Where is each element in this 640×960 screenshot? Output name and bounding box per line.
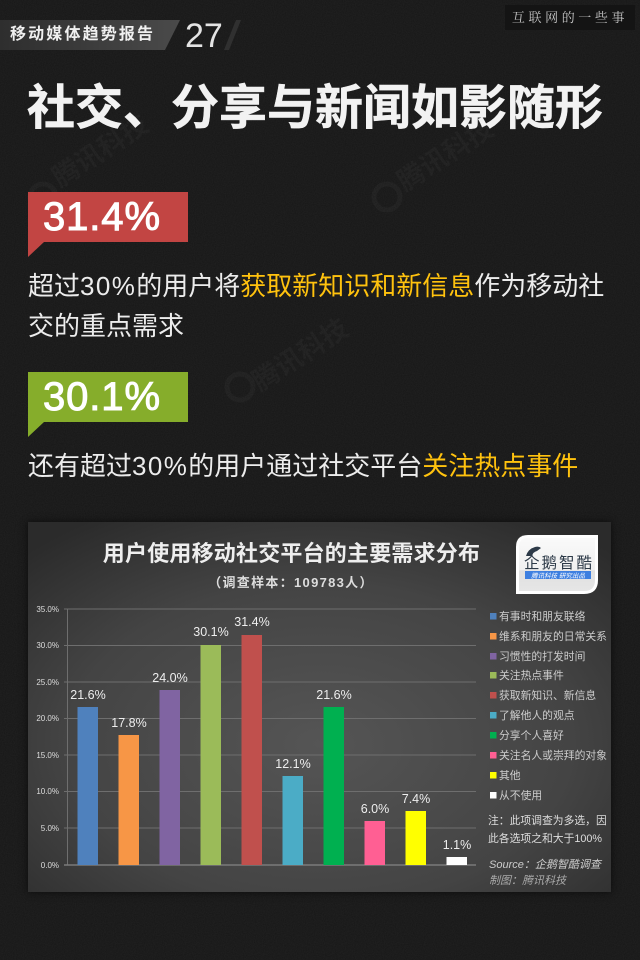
text block: finding one: 超过30%的用户将获取新知识和新信息作为移动社 (28, 271, 604, 301)
callout: 31.4%: 31.4% (43, 195, 161, 239)
legend: 习惯性的打发时间 (499, 649, 585, 663)
callout: 30.1%: 30.1% (43, 375, 161, 419)
bar value labels: 7.4% (402, 792, 430, 806)
bar value labels: 1.1% (443, 838, 471, 852)
panel: chart (28, 522, 611, 892)
bar value labels (70, 615, 471, 852)
y axis labels: 30.0% (36, 641, 59, 650)
legend: 了解他人的观点 (499, 708, 575, 722)
legend: 关注名人或崇拜的对象 (499, 748, 607, 762)
y axis labels: 10.0% (36, 787, 59, 796)
source credit: Source：企鹅智酷调查 (489, 858, 603, 871)
chart note: 注：此项调查为多选，因 (488, 813, 607, 827)
source credit (489, 858, 603, 887)
bars (78, 635, 467, 865)
y axis labels: 35.0% (36, 605, 59, 614)
chart title: 用户使用移动社交平台的主要需求分布 (103, 541, 480, 566)
y axis labels: 20.0% (36, 714, 59, 723)
legend: 关注热点事件 (499, 668, 564, 682)
legend: 维系和朋友的日常关系 (499, 629, 607, 643)
title: 社交、分享与新闻如影随形 (27, 82, 603, 135)
y axis labels: 5.0% (41, 824, 59, 833)
legend: 有事时和朋友联络 (499, 609, 586, 623)
brand tag (505, 5, 635, 30)
bar value labels: 17.8% (111, 716, 147, 730)
y axis and gridlines (64, 609, 476, 865)
logo badge: 企鹅智酷 (524, 554, 592, 572)
chart note (488, 813, 607, 845)
legend: 其他 (499, 769, 521, 782)
bar value labels: 21.6% (70, 688, 106, 702)
chart note: 此各选项之和大于100% (488, 831, 602, 845)
y axis labels: 25.0% (36, 678, 59, 687)
bar value labels: 31.4% (234, 615, 270, 629)
header tab: 移动媒体趋势报告 (10, 26, 155, 43)
bar value labels: 6.0% (361, 802, 389, 816)
bar value labels: 24.0% (152, 671, 188, 685)
logo badge (516, 535, 598, 594)
bar value labels: 21.6% (316, 688, 352, 702)
bar value labels: 30.1% (193, 625, 229, 639)
text block: finding two: 还有超过30%的用户通过社交平台关注热点事件 (28, 451, 578, 481)
callout: 31.4% (28, 192, 188, 257)
background watermarks: 腾讯科技 (47, 109, 154, 193)
chart subtitle: （调查样本：109783人） (208, 575, 374, 590)
y axis labels (36, 605, 59, 870)
header tab (0, 20, 180, 50)
legend: 从不使用 (499, 789, 542, 802)
text block: finding one: 交的重点需求 (28, 311, 184, 341)
legend: 分享个人喜好 (499, 728, 564, 742)
source credit: 制图：腾讯科技 (489, 874, 568, 887)
text block: finding one (28, 271, 604, 341)
brand tag: 互联网的一些事 (512, 10, 628, 25)
legend (490, 609, 607, 802)
y axis labels: 15.0% (36, 751, 59, 760)
background watermarks: 腾讯科技 (392, 113, 499, 197)
bar value labels: 12.1% (275, 757, 311, 771)
callout: 30.1% (28, 372, 188, 437)
legend: 获取新知识、新信息 (499, 688, 596, 702)
y axis labels: 0.0% (41, 861, 59, 870)
page number: 27 (185, 17, 223, 55)
background watermarks: 腾讯科技 (247, 313, 354, 397)
page number slash (224, 20, 241, 50)
logo badge: 腾讯科技 研究出品 (531, 572, 585, 580)
